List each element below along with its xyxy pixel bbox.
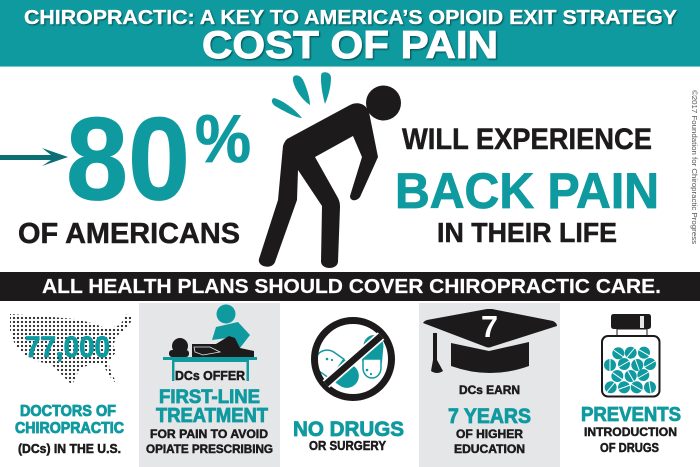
icon: graduation cap — [423, 309, 557, 373]
subtitle: COST OF PAIN — [202, 24, 498, 67]
panel: prevents: OF DRUGS — [600, 441, 659, 455]
in their life: IN THEIR LIFE — [437, 217, 617, 248]
7 years: 7 YEARS — [448, 405, 531, 428]
panel: first-line treatment: OPIATE PRESCRIBING — [146, 442, 273, 456]
icon: prohibited pills — [310, 320, 392, 398]
panel: first-line treatment: TREATMENT — [156, 405, 268, 427]
number 7 on cap: 7 — [481, 309, 498, 344]
number: 77,000 — [25, 331, 110, 364]
panel: 77,000 doctors: (DCs) IN THE U.S. — [18, 442, 121, 456]
prevents label: PREVENTS — [581, 404, 681, 426]
label: DOCTORS OF — [20, 403, 116, 420]
copyright note: ©2017 Foundation for Chiropractic Progress — [690, 90, 698, 245]
black banner — [0, 272, 700, 301]
or surgery: OR SURGERY — [309, 439, 387, 453]
no drugs label: NO DRUGS — [293, 418, 404, 441]
icon: dotted US map — [10, 314, 133, 385]
first-line treatment: FIRST-LINE — [159, 387, 260, 408]
text: will experience back pain in their life: WILL EXPERIENCE — [402, 123, 652, 156]
arrow — [0, 148, 68, 166]
icon: chiropractor and patient — [163, 304, 257, 381]
panel: 77,000 doctors — [10, 314, 133, 456]
DCs earn: DCs EARN — [459, 383, 520, 397]
header banner — [0, 0, 700, 67]
panel: prevents — [581, 314, 681, 455]
introduction of drugs: INTRODUCTION — [584, 425, 677, 439]
panel: 7 years: EDUCATION — [454, 442, 525, 456]
panel: first-line treatment — [139, 303, 280, 467]
statistic: 80 percent: 80 — [66, 94, 190, 226]
panel: 77,000 doctors: CHIROPRACTIC — [15, 420, 124, 437]
description: FOR PAIN TO AVOID — [150, 427, 268, 441]
text: will experience back pain in their life — [395, 123, 659, 248]
icon: person with back pain — [259, 72, 401, 268]
title: CHIROPRACTIC: A KEY TO AMERICA’S OPIOID EXIT STRATEGY — [24, 7, 678, 29]
of higher education: OF HIGHER — [456, 427, 523, 441]
back pain highlight: BACK PAIN — [395, 163, 659, 219]
percent sign: % — [195, 101, 251, 177]
icon: pill bottle — [602, 314, 660, 396]
DCs offer: DCs OFFER — [175, 369, 245, 383]
text: of Americans: OF AMERICANS — [18, 218, 240, 250]
panel: no drugs — [293, 320, 404, 453]
panel: 7 years — [419, 303, 560, 467]
banner text: ALL HEALTH PLANS SHOULD COVER CHIROPRACTIC CARE. — [42, 275, 661, 298]
